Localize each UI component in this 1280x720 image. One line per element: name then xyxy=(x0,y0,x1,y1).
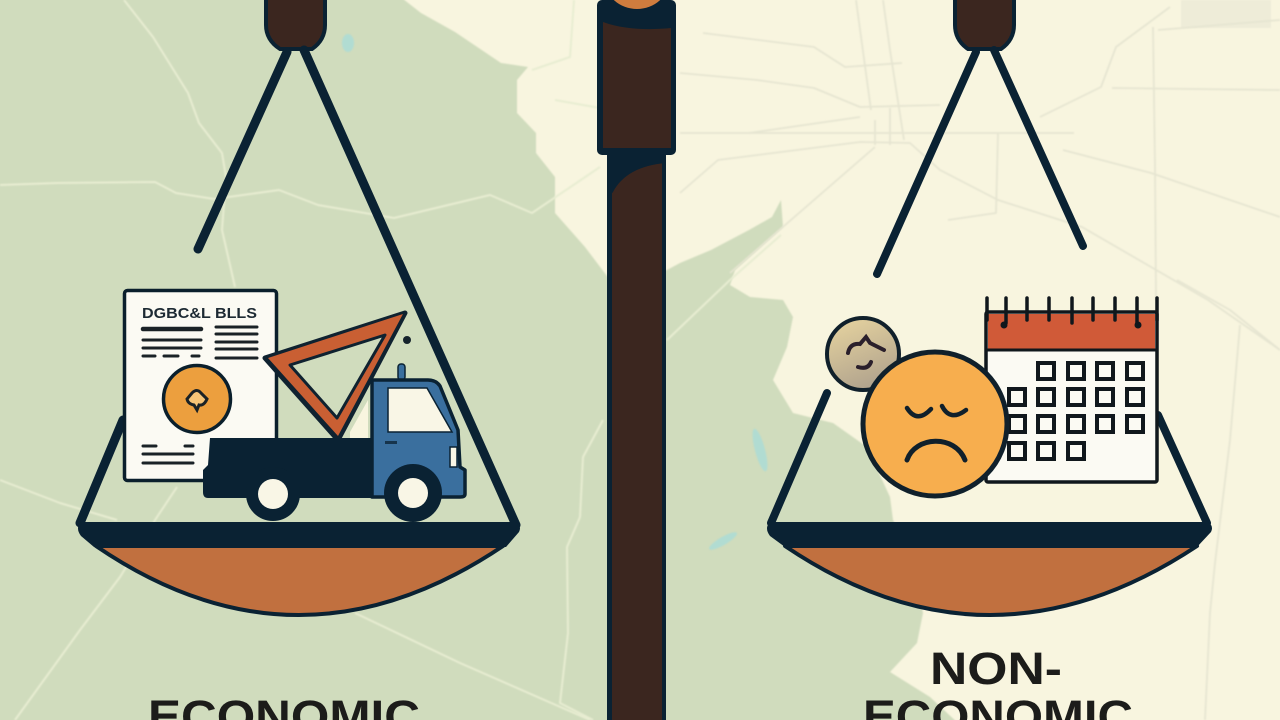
pan bowl xyxy=(785,546,1197,615)
pan rim xyxy=(78,522,520,547)
icon: sad face xyxy=(863,352,1007,496)
icon: pickup truck xyxy=(203,364,465,522)
pan bowl xyxy=(96,546,503,615)
heading: non-economic: NON- xyxy=(930,643,1062,694)
left panel: economic scale pan xyxy=(78,290,520,615)
document heading: DGBC&L BLLS xyxy=(142,305,257,322)
pan rim xyxy=(767,522,1212,547)
icon: coin with dollar xyxy=(827,318,899,390)
icon: medical bills document xyxy=(124,290,276,480)
right hanger xyxy=(771,0,1207,523)
icon: coin on bill xyxy=(164,366,230,432)
icon: warning triangle xyxy=(265,313,411,440)
central pole xyxy=(597,0,676,720)
heading: non-economic xyxy=(863,643,1133,720)
pivot circle xyxy=(605,0,669,9)
left hanger xyxy=(80,0,516,525)
icon: calendar xyxy=(986,298,1157,482)
right panel: non-economic scale pan xyxy=(767,298,1212,615)
